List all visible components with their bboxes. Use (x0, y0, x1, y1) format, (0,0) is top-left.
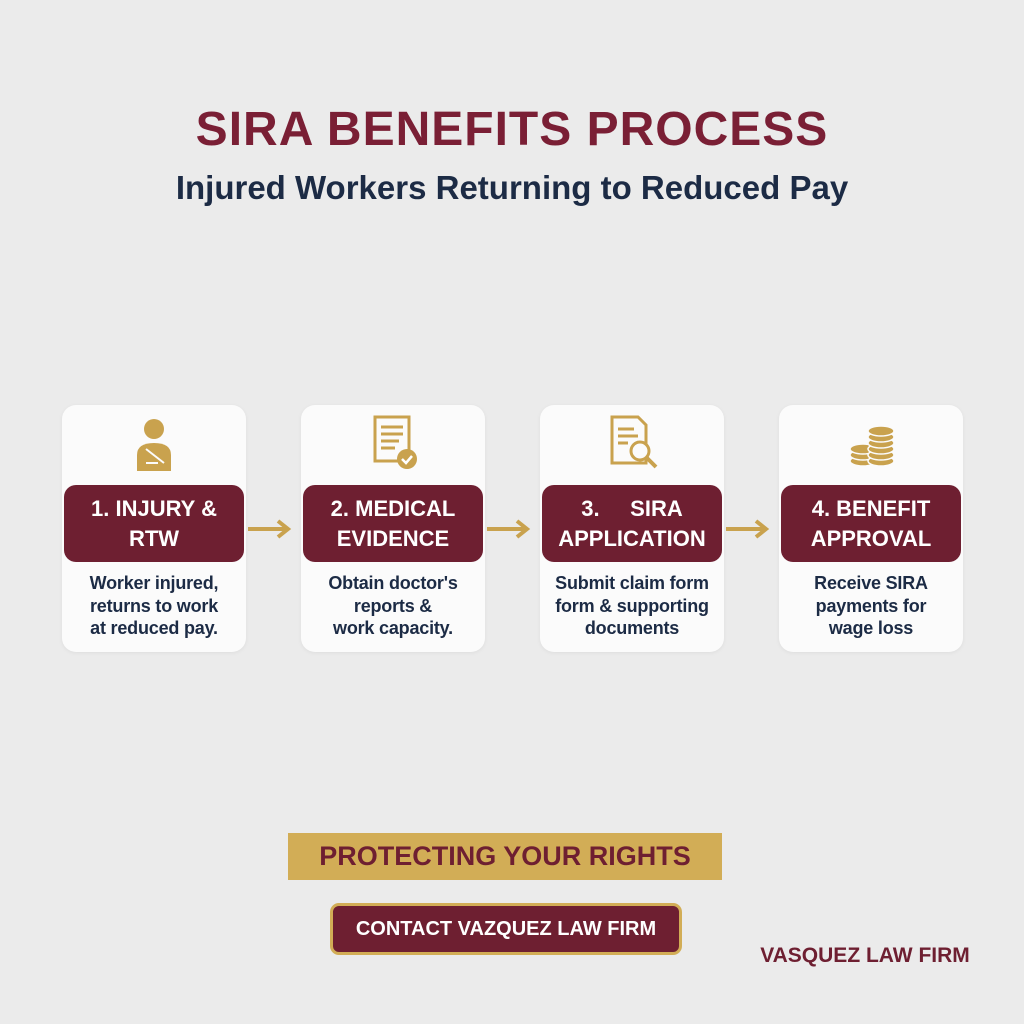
description: reports & (354, 596, 432, 616)
icon: injured worker (137, 419, 171, 471)
description: payments for (816, 596, 926, 616)
description: returns to work (90, 596, 218, 616)
panel: step 3 (540, 405, 724, 652)
arrow (726, 520, 770, 538)
footer brand: VASQUEZ LAW FIRM (760, 944, 970, 967)
banner: protecting your rights (288, 833, 722, 880)
description: form & supporting (555, 596, 709, 616)
description: Receive SIRA (814, 573, 928, 593)
label: EVIDENCE (337, 526, 449, 550)
arrow (487, 520, 530, 538)
description: Worker injured, (90, 573, 218, 593)
description: documents (585, 618, 679, 638)
label (303, 485, 483, 562)
arrow (248, 520, 292, 538)
description (555, 573, 709, 638)
label: 3. SIRA (581, 496, 683, 520)
description (328, 573, 458, 638)
label (64, 485, 244, 562)
label: APPROVAL (811, 526, 931, 550)
panel: step 1 (62, 405, 246, 652)
button: contact (330, 903, 682, 955)
label: 2. MEDICAL (331, 496, 455, 520)
button: contact: CONTACT VAZQUEZ LAW FIRM (356, 918, 656, 940)
description: Obtain doctor's (328, 573, 458, 593)
description: Submit claim form (555, 573, 709, 593)
label: APPLICATION (558, 526, 706, 550)
label (542, 485, 722, 562)
label (781, 485, 961, 562)
icon: coins (850, 426, 894, 466)
label: 1. INJURY & (91, 496, 217, 520)
description (814, 573, 928, 638)
subtitle: Injured Workers Returning to Reduced Pay (176, 169, 848, 206)
icon: document search (610, 416, 658, 468)
description (90, 573, 218, 638)
description: work capacity. (333, 618, 453, 638)
banner: protecting your rights: PROTECTING YOUR RIGHTS (319, 841, 691, 871)
description: at reduced pay. (90, 618, 218, 638)
title: SIRA BENEFITS PROCESS (196, 103, 828, 156)
panel: step 2 (301, 405, 485, 652)
label: RTW (129, 526, 179, 550)
panel: step 4 (779, 405, 963, 652)
icon: document check (374, 416, 417, 469)
description: wage loss (829, 618, 913, 638)
label: 4. BENEFIT (812, 496, 930, 520)
